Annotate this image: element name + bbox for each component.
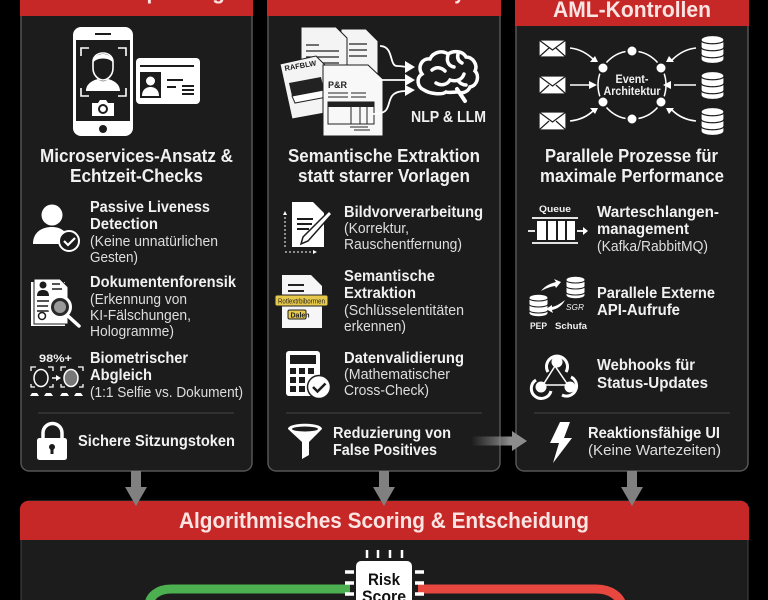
arrow: panel 2 to scoring — [373, 471, 395, 506]
text: Reaktionsfähige UI — [588, 425, 721, 459]
icon: semantic extraction document — [275, 275, 328, 328]
text: Webhooks für Status-Updates — [597, 357, 708, 392]
icons: databases — [701, 36, 724, 136]
text: Webhooks für Status-Updates: Status-Updates — [597, 375, 708, 392]
text: Bildvorverarbeitung: Rauschentfernung) — [344, 237, 462, 253]
text: Passive Liveness Detection: Passive Liveness — [90, 199, 210, 216]
arrows: documents to brain — [372, 46, 415, 114]
text: Datenvalidierung: Datenvalidierung — [344, 350, 464, 367]
subheading: Semantische Extraktion — [288, 145, 480, 166]
text: Dokumentenforensik: KI-Fälschungen, — [90, 308, 191, 324]
icon: biometric face match: 98%+ — [39, 353, 72, 365]
icon: document stack: RAFBLW — [284, 58, 318, 73]
icon: risk score chip — [345, 550, 424, 600]
green path — [149, 589, 350, 600]
text: Bildvorverarbeitung: Bildvorverarbeitung — [344, 204, 483, 221]
text: Dokumentenforensik — [90, 274, 236, 340]
icon: person with check — [33, 204, 79, 251]
icon: queue: Queue — [539, 204, 571, 215]
subheading: Parallele Prozesse für — [545, 145, 718, 166]
panel: Identitätsprüfung — [20, 0, 253, 471]
icon: document with pen — [283, 202, 332, 254]
panel heading: scoring: Algorithmisches Scoring & Entscheidung — [179, 508, 589, 533]
icon: parallel API databases: SGR — [566, 302, 584, 312]
subheading: Microservices-Ansatz & — [40, 145, 233, 166]
diagram: event architecture ring: Event- — [616, 72, 648, 86]
panel: Dokumentenanalyse — [267, 0, 501, 471]
text: Parallele Externe API-Aufrufe — [597, 285, 715, 319]
panel: AML-Kontrollen — [515, 0, 749, 471]
label: NLP & LLM: NLP & LLM — [411, 109, 486, 126]
red path — [418, 589, 623, 600]
text: Reduzierung von False Positives: False Positives — [333, 442, 437, 459]
icon: biometric face match — [30, 353, 83, 396]
icon: document stack: P&R — [328, 80, 348, 90]
text: Reaktionsfähige UI: Reaktionsfähige UI — [588, 425, 720, 442]
subheading — [540, 145, 724, 186]
subheading — [288, 145, 480, 186]
icons: envelopes — [539, 40, 566, 130]
text: Dokumentenforensik: Hologramme) — [90, 324, 174, 340]
icon: webhook — [531, 356, 577, 398]
text: Reaktionsfähige UI: (Keine Wartezeiten) — [588, 443, 721, 459]
arrows: into event ring — [570, 48, 696, 121]
icon: brain — [418, 52, 477, 101]
text: Webhooks für Status-Updates: Webhooks für — [597, 357, 695, 374]
icon: semantic extraction document: Rotlextrbiborrnen — [278, 296, 325, 306]
subheading — [40, 145, 233, 186]
text: Reduzierung von False Positives — [333, 425, 451, 459]
subheading: maximale Performance — [540, 165, 724, 186]
text: Datenvalidierung: Cross-Check) — [344, 383, 429, 399]
text: Biometrischer Abgleich: Biometrischer — [90, 350, 188, 367]
text: Parallele Externe API-Aufrufe: API-Aufrufe — [597, 302, 680, 319]
diagram: event architecture ring — [598, 46, 666, 124]
text: Passive Liveness Detection: (Keine unnatürlichen — [90, 234, 218, 250]
text: Semantische Extraktion: (Schlüsselentitäten — [344, 303, 464, 319]
icon: funnel — [288, 424, 322, 459]
text: Semantische Extraktion: erkennen) — [344, 319, 406, 335]
text: Bildvorverarbeitung: (Korrektur, — [344, 221, 409, 237]
text: Dokumentenforensik: (Erkennung von — [90, 292, 187, 308]
text: Parallele Externe API-Aufrufe: Parallele Externe — [597, 285, 715, 302]
text: Semantische Extraktion — [344, 268, 464, 335]
subheading: Echtzeit-Checks — [70, 165, 203, 186]
diagram: event architecture ring: Architektur — [604, 84, 661, 98]
text: Biometrischer Abgleich — [90, 350, 243, 401]
text: Sichere Sitzungstoken: Sichere Sitzungstoken — [78, 433, 235, 450]
icon: document stack — [280, 27, 383, 136]
icon: lock — [37, 424, 67, 460]
icon: calculator with check — [286, 351, 330, 398]
text: Passive Liveness Detection — [90, 199, 218, 266]
text: Bildvorverarbeitung — [344, 204, 483, 253]
panel: Algorithmisches Scoring & Entscheidung — [20, 501, 749, 600]
text: Passive Liveness Detection: Gesten) — [90, 250, 138, 266]
arrow: panel 3 to scoring — [621, 471, 643, 506]
icon: ID card — [136, 58, 200, 104]
text: Semantische Extraktion: Extraktion — [344, 285, 416, 302]
icon: risk score chip: Risk — [368, 570, 400, 589]
text: Warteschlangenmanagement: Warteschlangen- — [597, 204, 719, 221]
icon: parallel API databases: PEP — [530, 321, 548, 332]
arrow: panel 2 to panel 3 — [471, 431, 527, 451]
icon: document forensics — [31, 279, 79, 326]
icon: lightning bolt — [550, 422, 572, 463]
text: Warteschlangenmanagement — [597, 204, 719, 255]
text: Datenvalidierung — [344, 350, 464, 399]
icon: smartphone selfie — [73, 27, 133, 136]
text: Datenvalidierung: (Mathematischer — [344, 367, 450, 383]
text: Biometrischer Abgleich: (1:1 Selfie vs. Dokument) — [90, 385, 243, 401]
text: Warteschlangenmanagement: management — [597, 221, 689, 238]
icon: queue — [528, 204, 588, 243]
text: Semantische Extraktion: Semantische — [344, 268, 435, 285]
text: Dokumentenforensik: Dokumentenforensik — [90, 274, 236, 291]
icon: parallel API databases: Schufa — [555, 321, 588, 332]
arrow: panel 1 to scoring — [125, 471, 147, 506]
text: Passive Liveness Detection: Detection — [90, 216, 158, 233]
icon: parallel API databases — [529, 276, 588, 332]
text: Reduzierung von False Positives: Reduzierung von — [333, 425, 451, 442]
text: Biometrischer Abgleich: Abgleich — [90, 367, 152, 384]
text: Warteschlangenmanagement: (Kafka/RabbitMQ) — [597, 239, 708, 255]
subheading: statt starrer Vorlagen — [298, 165, 470, 186]
icon: semantic extraction document: Dalen — [290, 312, 310, 320]
